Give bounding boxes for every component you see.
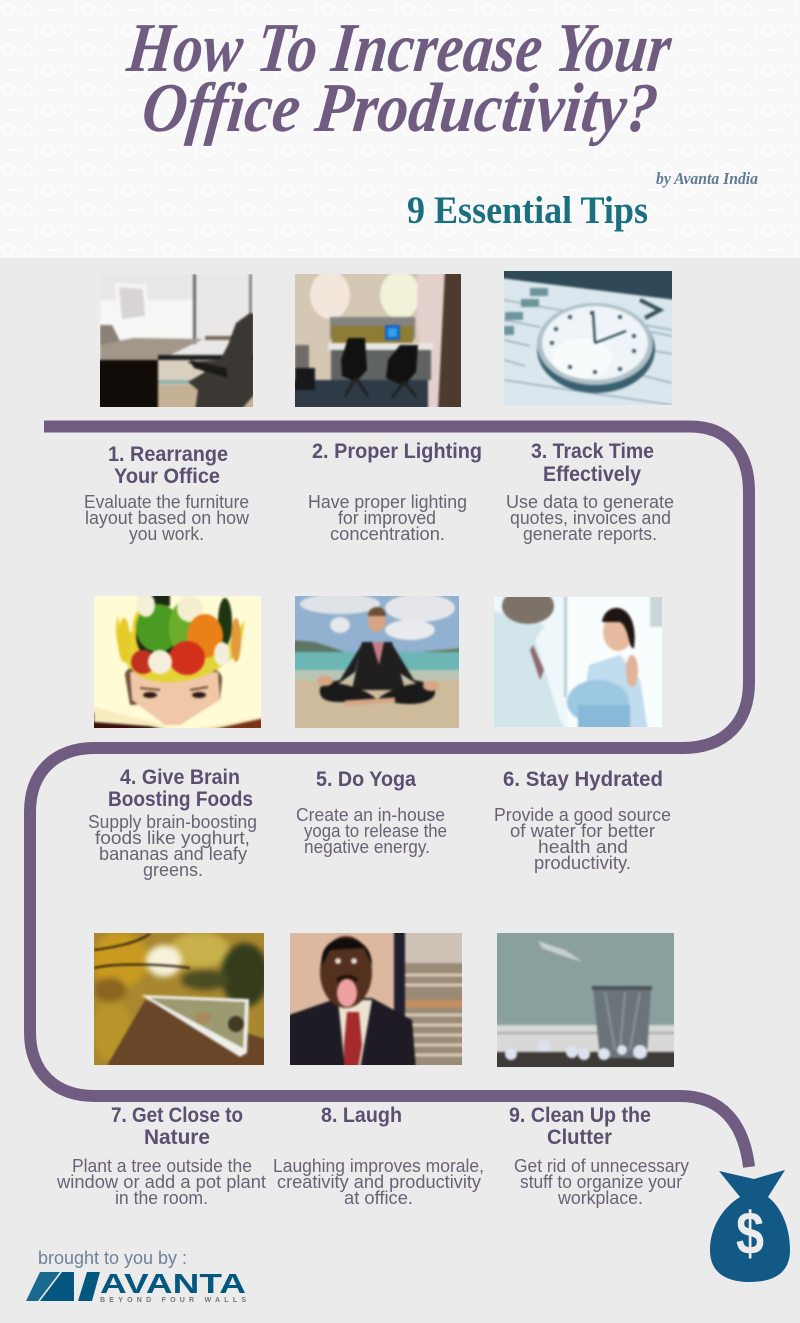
photo 4: brain boosting foods bbox=[94, 596, 261, 728]
tip 7: 7. Get Close to bbox=[111, 1104, 243, 1127]
tip 5 bbox=[296, 768, 447, 857]
tip 6 bbox=[494, 768, 671, 873]
photo 7: office close to nature bbox=[94, 933, 264, 1065]
photo 8: laughing man bbox=[286, 929, 466, 1069]
photo 5: yoga on the beach bbox=[295, 596, 459, 728]
tip 9: Get rid of unnecessary bbox=[514, 1156, 689, 1176]
tip 9 bbox=[509, 1104, 689, 1208]
tip 6: health and bbox=[538, 837, 628, 857]
tip 2: Have proper lighting bbox=[308, 492, 467, 512]
tip 1: 1. Rearrange bbox=[108, 443, 228, 466]
photo 9: waste bin and clutter bbox=[493, 929, 678, 1071]
logo: Avanta: AVANTA bbox=[100, 1268, 246, 1299]
logo: Avanta: BEYOND FOUR WALLS bbox=[100, 1297, 246, 1304]
photo 2: cubicle lighting bbox=[295, 274, 461, 407]
icon: money bag: $ bbox=[736, 1200, 764, 1267]
tip 4: 4. Give Brain bbox=[120, 766, 240, 789]
photo 3: stopwatch bbox=[500, 267, 676, 409]
tip 6: 6. Stay Hydrated bbox=[503, 768, 663, 791]
tip 8 bbox=[273, 1104, 484, 1208]
tip 2: for improved bbox=[338, 508, 436, 528]
tip 2: 2. Proper Lighting bbox=[312, 440, 482, 463]
tip 3: Use data to generate bbox=[506, 492, 674, 512]
tip 1: Your Office bbox=[114, 465, 220, 488]
tip 5: negative energy. bbox=[304, 837, 430, 857]
tip 3: generate reports. bbox=[523, 524, 657, 544]
tip 3: Effectively bbox=[543, 463, 641, 486]
tip 5: Create an in-house bbox=[296, 805, 445, 825]
title: How To Increase Your bbox=[123, 9, 676, 87]
tip 3: 3. Track Time bbox=[531, 440, 654, 463]
tip 1 bbox=[84, 443, 250, 544]
tip 5: 5. Do Yoga bbox=[316, 768, 416, 791]
tip 9: workplace. bbox=[557, 1188, 643, 1208]
tip 7: window or add a pot plant bbox=[56, 1172, 266, 1192]
tip 1: you work. bbox=[129, 524, 204, 544]
tip 2 bbox=[308, 440, 482, 544]
tip 7: Plant a tree outside the bbox=[72, 1156, 252, 1176]
tip 6: productivity. bbox=[534, 853, 631, 873]
tip 8: 8. Laugh bbox=[321, 1104, 402, 1127]
tip 7: Nature bbox=[144, 1126, 210, 1149]
tip 9: 9. Clean Up the bbox=[509, 1104, 651, 1127]
tip 8: at office. bbox=[344, 1188, 413, 1208]
header patterned panel bbox=[0, 0, 800, 258]
byline: by Avanta India bbox=[656, 169, 758, 188]
tip 9: stuff to organize your bbox=[520, 1172, 682, 1192]
tip 7: in the room. bbox=[115, 1188, 208, 1208]
tip 7 bbox=[56, 1104, 266, 1208]
subtitle: 9 Essential Tips bbox=[407, 189, 648, 232]
tip 4 bbox=[88, 766, 257, 880]
photo 6: staying hydrated bbox=[494, 597, 662, 727]
tip 1: layout based on how bbox=[85, 508, 250, 528]
tip 9: Clutter bbox=[547, 1126, 612, 1149]
tip 2: concentration. bbox=[330, 524, 445, 544]
title: Office Productivity? bbox=[139, 69, 662, 147]
tip 4: greens. bbox=[143, 860, 203, 880]
tip 4: Boosting Foods bbox=[108, 788, 253, 811]
tip 3 bbox=[506, 440, 674, 544]
tip 1: Evaluate the furniture bbox=[84, 492, 249, 512]
photo 1: office desk bbox=[100, 274, 253, 407]
tip 8: Laughing improves morale, bbox=[273, 1156, 484, 1176]
tip 5: yoga to release the bbox=[304, 821, 447, 841]
tip 8: creativity and productivity bbox=[277, 1172, 481, 1192]
tip 4: Supply brain-boosting bbox=[88, 812, 257, 832]
tip 6: of water for better bbox=[510, 821, 655, 841]
tip 6: Provide a good source bbox=[494, 805, 671, 825]
icon: money bag bbox=[710, 1170, 790, 1282]
credit text: brought to you by : bbox=[38, 1248, 187, 1268]
tip 4: foods like yoghurt, bbox=[95, 828, 250, 848]
tip 3: quotes, invoices and bbox=[510, 508, 671, 528]
winding path bbox=[30, 426, 749, 1167]
logo: Avanta bbox=[26, 1268, 246, 1304]
tip 4: bananas and leafy bbox=[99, 844, 247, 864]
title bbox=[123, 9, 676, 147]
